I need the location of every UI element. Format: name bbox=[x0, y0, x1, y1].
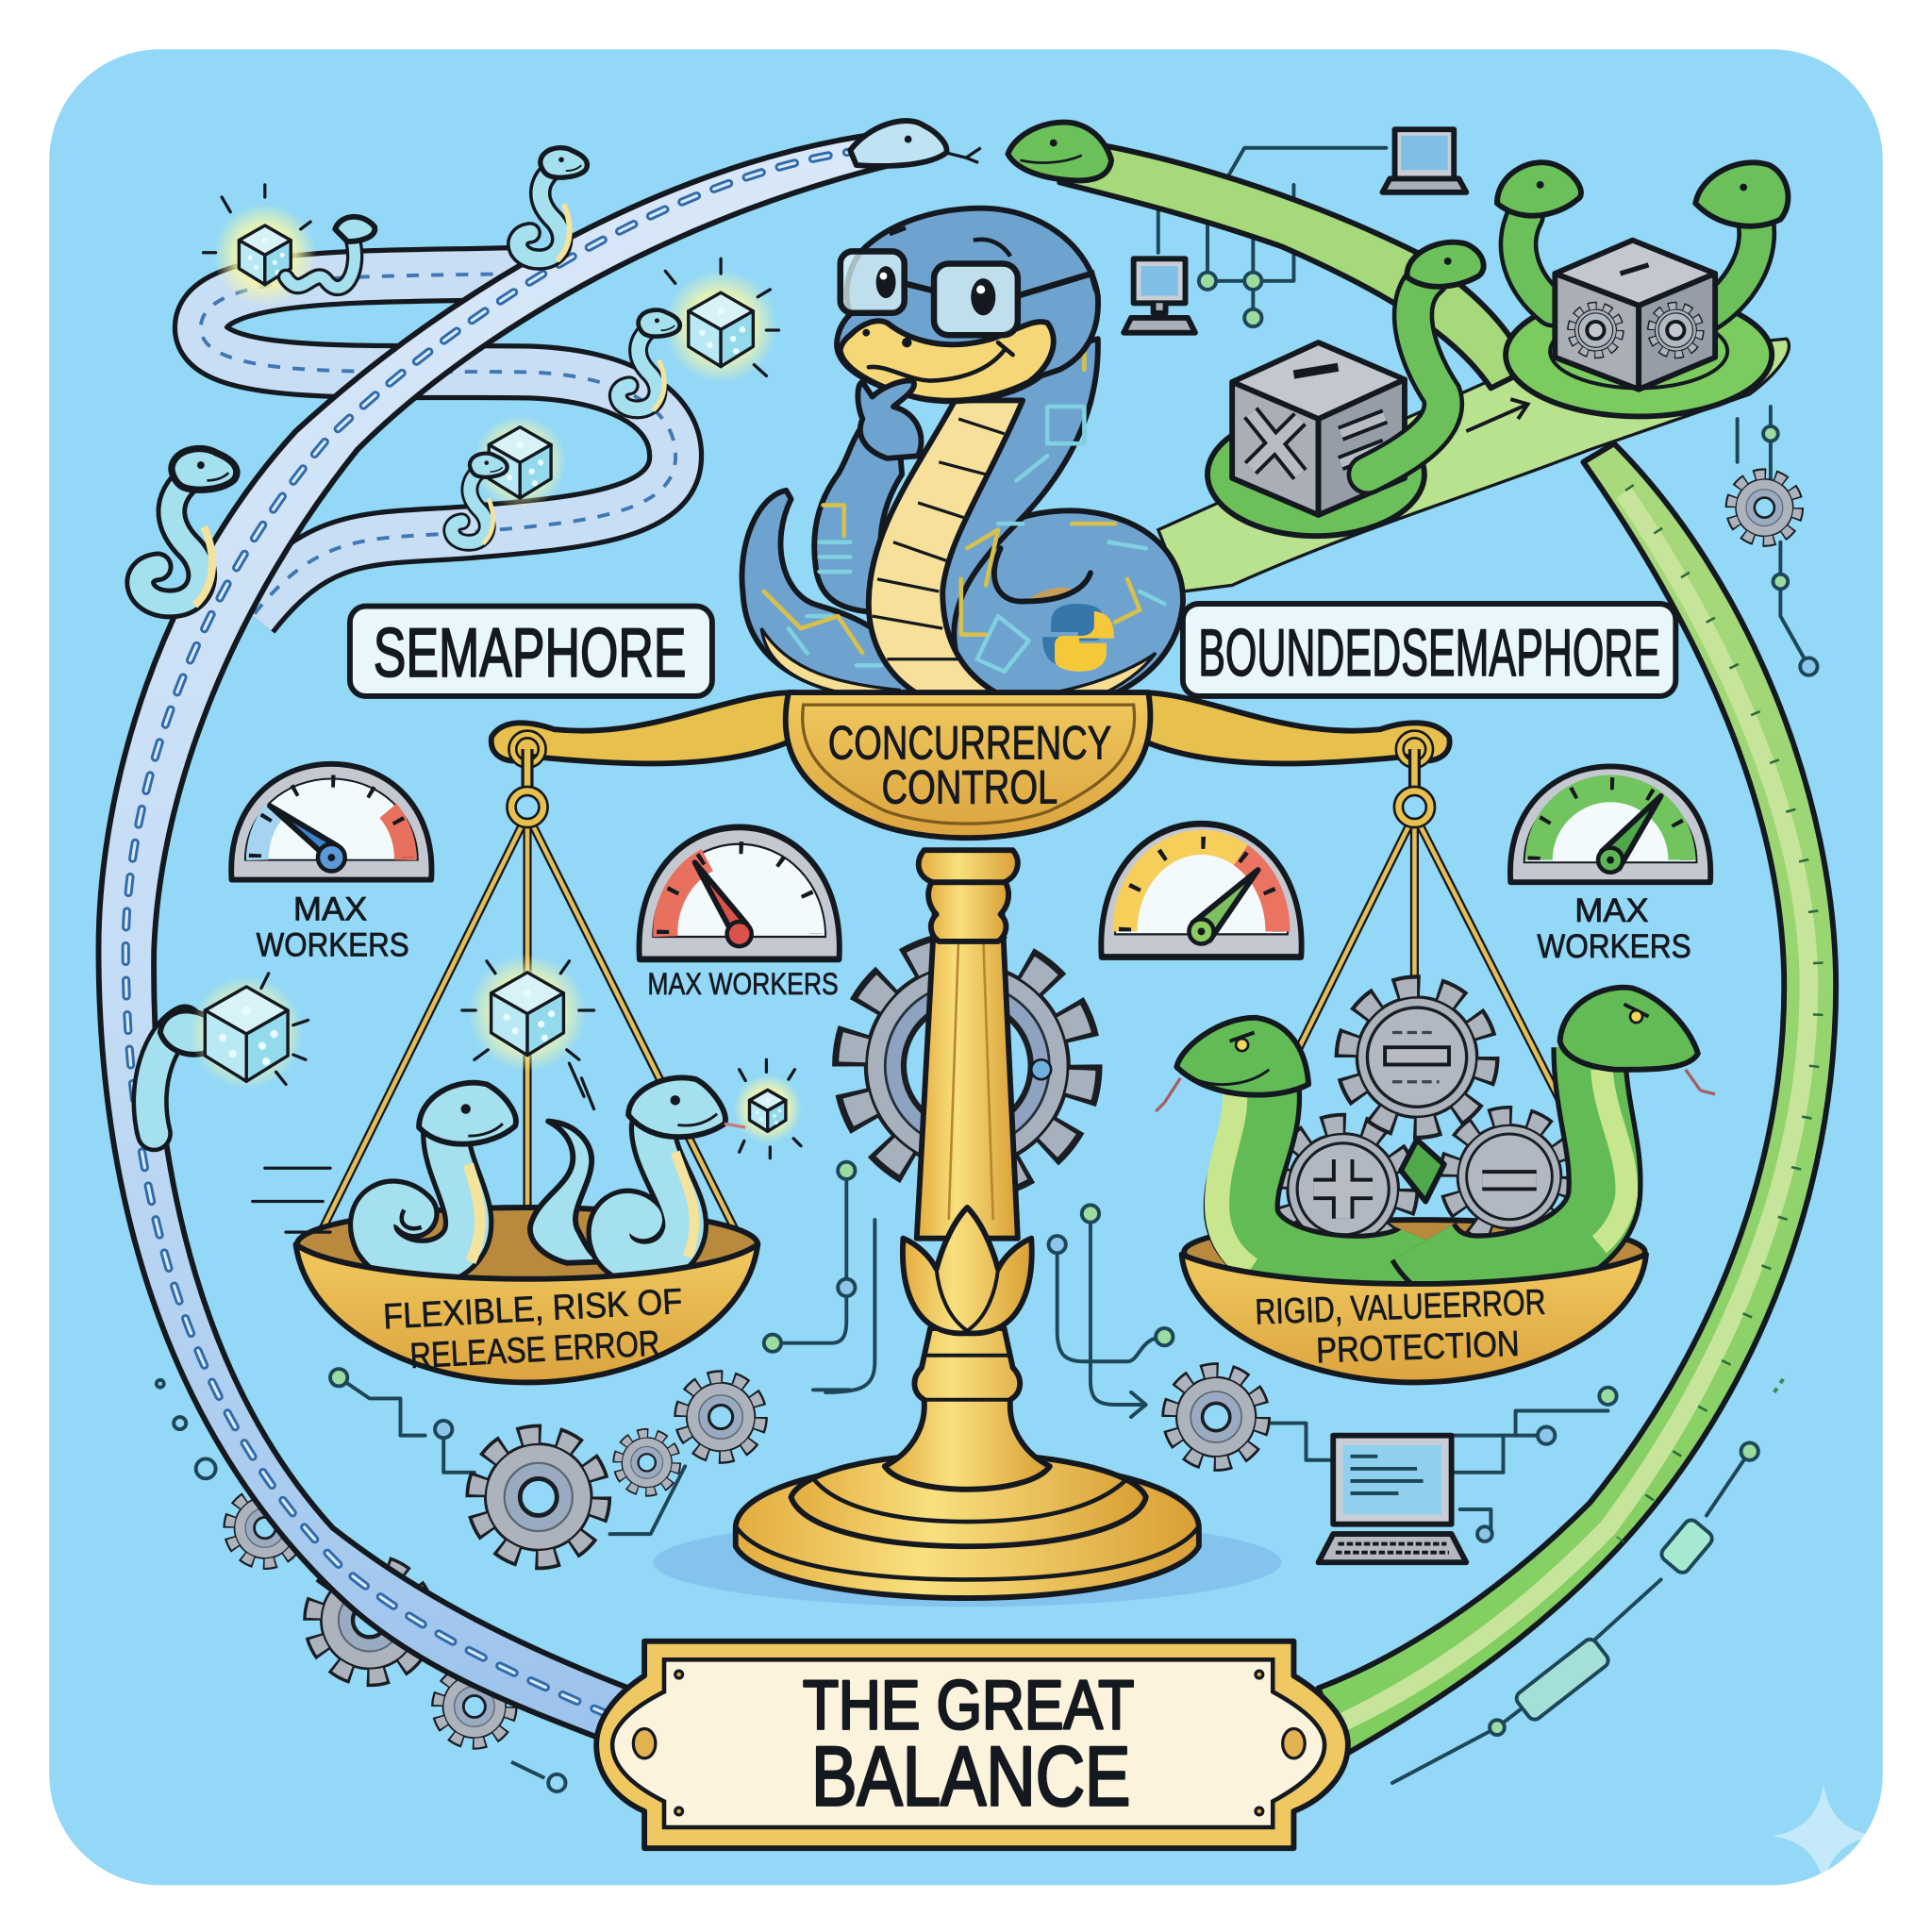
snake: left green bbox=[1156, 1018, 1432, 1272]
circuit and gear: right side bbox=[1731, 407, 1818, 675]
right pan bowl with caption bbox=[1182, 1255, 1646, 1382]
head bbox=[837, 208, 1098, 401]
icon: green snake head top bbox=[1008, 123, 1111, 180]
tail bbox=[741, 491, 918, 700]
snake: left pan second bbox=[610, 1077, 745, 1263]
ring under calculator cube bbox=[1208, 413, 1424, 536]
gauge: left max workers bbox=[231, 764, 432, 880]
python mascot bbox=[741, 208, 1183, 712]
gear: minus bbox=[1449, 1116, 1570, 1238]
lower stem bbox=[885, 1328, 1050, 1490]
snake: middle road bbox=[618, 310, 680, 410]
blue semaphore track with snake head bbox=[98, 121, 981, 1740]
central plaque: concurrency control: CONCURRENCY bbox=[828, 717, 1111, 770]
left hanger bbox=[511, 734, 543, 823]
gears: lower left behind track bbox=[229, 1492, 511, 1743]
title plaque: the great balance: BALANCE bbox=[811, 1729, 1130, 1823]
circuit markings bbox=[789, 407, 1164, 672]
right beam bbox=[1140, 692, 1450, 763]
small blue snakes carrying cubes bbox=[141, 148, 778, 1134]
jaw bbox=[841, 321, 1054, 401]
text: max workers right bbox=[1537, 892, 1691, 965]
green upper track bbox=[1059, 138, 1528, 388]
gauge: middle right bbox=[1101, 824, 1302, 957]
title plaque: the great balance: THE GREAT bbox=[803, 1667, 1134, 1743]
text: max workers left: MAX bbox=[293, 891, 367, 928]
lower arm bbox=[814, 425, 902, 612]
right pan back bbox=[1184, 1220, 1645, 1284]
green ramp platform and snakes with cubes bbox=[1008, 123, 1789, 591]
green star between gears bbox=[1401, 1140, 1444, 1201]
caption: FLEXIBLE, RISK OF bbox=[382, 1282, 683, 1337]
left beam bbox=[491, 692, 794, 763]
circuit chain: lower right bbox=[1392, 1374, 1787, 1783]
tail underside bbox=[761, 628, 906, 700]
gauge: middle left bbox=[640, 827, 840, 959]
snake: wavy top left bbox=[286, 217, 375, 288]
snake: top bbox=[518, 148, 587, 260]
winding blue road bbox=[201, 274, 675, 616]
label: boundedsemaphore bbox=[1183, 604, 1675, 696]
text: max workers right: MAX bbox=[1574, 892, 1649, 929]
snake: left pan first bbox=[374, 1083, 516, 1263]
text: max workers left bbox=[257, 891, 409, 964]
text: max workers middle: MAX WORKERS bbox=[647, 966, 839, 1001]
arrow on ramp bbox=[1466, 399, 1528, 431]
left scale pan strings bbox=[318, 820, 740, 1239]
cube with glow: top left bbox=[204, 185, 317, 307]
gear: calculator bbox=[1346, 987, 1488, 1127]
central plaque: concurrency control: CONTROL bbox=[882, 761, 1058, 814]
icon: blue snake head bbox=[850, 121, 947, 166]
snake: right green bbox=[1424, 988, 1715, 1272]
capital rings bbox=[928, 882, 1008, 941]
big gear behind column bbox=[851, 949, 1084, 1182]
ramp bbox=[1158, 339, 1789, 591]
gears: lower left bbox=[476, 1377, 761, 1559]
snake with cube: lower left bbox=[150, 974, 308, 1134]
hand at chin bbox=[858, 380, 922, 458]
small decorative nodes: lower left bbox=[157, 1380, 566, 1791]
icon: python logo bbox=[1042, 604, 1114, 672]
caption: PROTECTION bbox=[1315, 1324, 1520, 1371]
small cube near left scale bbox=[733, 1059, 802, 1158]
icon: monitor top right bbox=[1124, 258, 1195, 333]
snake: right of gear cube bbox=[1695, 162, 1788, 314]
neck bbox=[869, 339, 1098, 712]
base lower plate bbox=[736, 1466, 1199, 1598]
caption bbox=[382, 1282, 686, 1378]
label: semaphore bbox=[350, 607, 712, 696]
collar bbox=[919, 850, 1018, 882]
icon: laptop with code bbox=[1319, 1436, 1466, 1562]
central plaque: concurrency control bbox=[786, 692, 1150, 838]
text: max workers left: WORKERS bbox=[257, 927, 409, 964]
caption: RIGID, VALUEERROR bbox=[1255, 1283, 1546, 1333]
lotus bbox=[903, 1208, 1032, 1333]
base shadow bbox=[653, 1518, 1281, 1607]
green snakes: right pan bbox=[1156, 988, 1715, 1272]
smile bbox=[869, 342, 1013, 381]
circuit lines: top right bbox=[1158, 148, 1386, 326]
eyebrow bbox=[890, 228, 1010, 257]
right scale pan strings bbox=[1244, 820, 1595, 1171]
snake: lower road bbox=[452, 454, 508, 543]
ring under gear cube bbox=[1506, 293, 1772, 416]
rivets bbox=[633, 1671, 1305, 1815]
green boundedsemaphore track bbox=[1319, 443, 1836, 1756]
base mid plate bbox=[791, 1454, 1146, 1546]
left pan back bbox=[297, 1208, 758, 1281]
circuit lines: below right scale bbox=[1049, 1205, 1617, 1541]
coil hole bbox=[1026, 588, 1074, 601]
icon: grey cube with x and equals bbox=[1232, 342, 1405, 515]
glasses bbox=[841, 251, 1096, 335]
motion lines bbox=[253, 1063, 594, 1232]
balance scale stand bbox=[736, 850, 1199, 1598]
watermark sparkle bbox=[1772, 1784, 1875, 1885]
snake: left side coil bbox=[141, 448, 237, 606]
icon: laptop top right bbox=[1382, 129, 1466, 192]
caption: RELEASE ERROR bbox=[408, 1324, 660, 1376]
circuit lines: below left scale bbox=[330, 1162, 874, 1534]
glowing cube on left scale bbox=[462, 954, 594, 1072]
left pan bowl with caption bbox=[295, 1244, 758, 1382]
cube: lower road bbox=[474, 415, 567, 508]
cube with glow: right bbox=[664, 258, 778, 383]
shaft bbox=[917, 877, 1018, 1239]
gear: plus bbox=[1278, 1124, 1408, 1254]
label: semaphore: SEMAPHORE bbox=[374, 615, 687, 691]
snake: middle tail in left pan bbox=[530, 1122, 604, 1263]
gauge: right max workers bbox=[1510, 766, 1710, 882]
coil bbox=[918, 510, 1183, 712]
gear: below right scale bbox=[1170, 1371, 1263, 1463]
icon: grey cube with gears and percent bbox=[1555, 241, 1715, 390]
text: max workers right: WORKERS bbox=[1537, 928, 1691, 965]
coil underside bbox=[986, 653, 1156, 712]
right hanger bbox=[1398, 734, 1430, 823]
snake: left of gear cube bbox=[1497, 162, 1581, 308]
gears with operators: right pan bbox=[1278, 987, 1570, 1254]
belly bbox=[869, 400, 1047, 712]
caption bbox=[1255, 1283, 1548, 1374]
title plaque: the great balance bbox=[596, 1641, 1348, 1848]
snake: pushing cube bbox=[1368, 242, 1484, 475]
